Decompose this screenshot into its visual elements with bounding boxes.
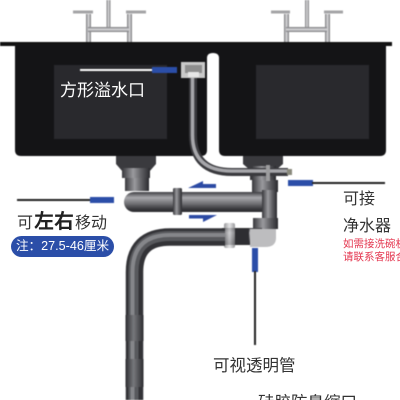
note pill bbox=[11, 236, 114, 257]
right basin bbox=[219, 44, 386, 156]
left basin bbox=[15, 44, 207, 156]
vertical tee pipe bbox=[253, 190, 278, 229]
red note bbox=[343, 238, 400, 263]
right callout pointer bbox=[288, 180, 385, 186]
bridge between basins bbox=[207, 44, 219, 58]
square overflow outlet bbox=[181, 62, 205, 78]
overflow pointer bbox=[80, 67, 177, 73]
transparent tube pointer bbox=[252, 248, 258, 345]
label: water purifier: 可接 bbox=[343, 191, 375, 208]
trap elbow bbox=[222, 223, 276, 248]
left callout pointer bbox=[17, 197, 114, 203]
arrow: left bbox=[188, 181, 216, 188]
left faucet bbox=[73, 0, 146, 42]
right faucet bbox=[271, 0, 343, 42]
corrugated drain hose bbox=[126, 235, 225, 400]
note pill: 注：27.5-46厘米 bbox=[16, 239, 109, 253]
label: moves left and right: 可左右移动 bbox=[17, 211, 107, 233]
label: overflow: 方形溢水口 bbox=[60, 81, 145, 100]
label: water purifier bbox=[343, 190, 391, 235]
arrow: right bbox=[189, 215, 217, 222]
left drain bbox=[116, 154, 156, 191]
right drain bbox=[243, 154, 283, 192]
sink rim bbox=[0, 42, 392, 46]
label: water purifier: 净水器 bbox=[343, 218, 391, 235]
overflow hose bbox=[192, 78, 292, 181]
horizontal connecting pipe bbox=[124, 188, 266, 215]
label: transparent tube: 可视透明管 bbox=[213, 357, 296, 375]
